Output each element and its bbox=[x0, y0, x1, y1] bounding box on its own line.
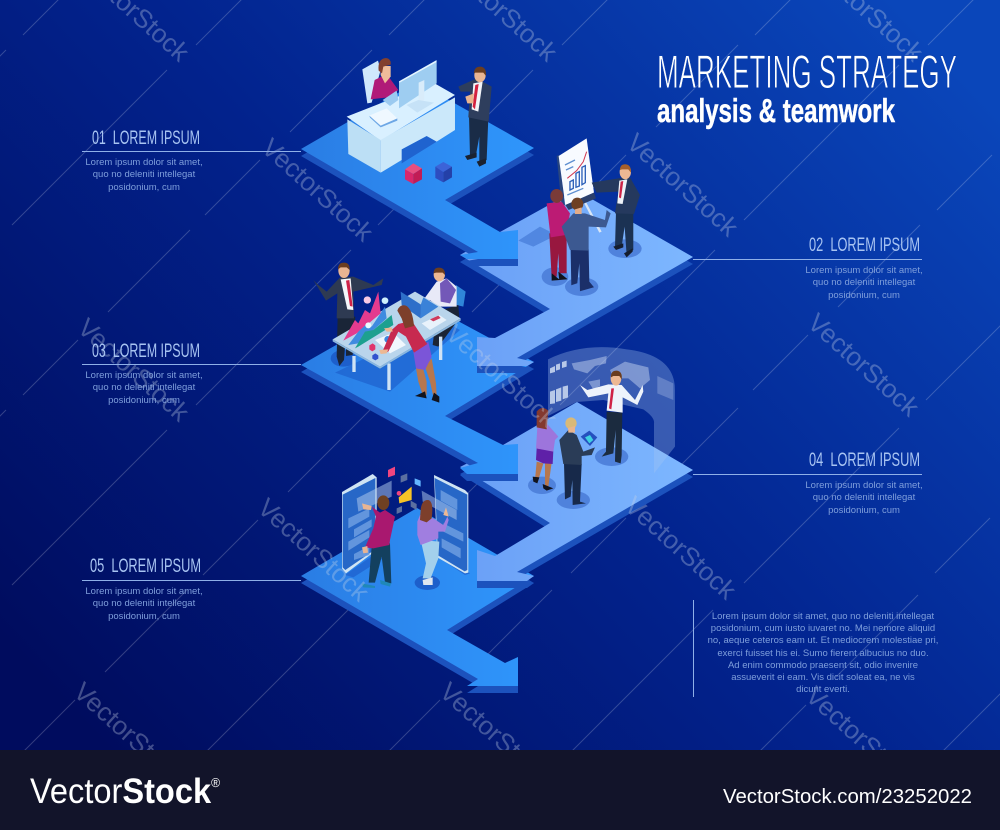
label 02: Lorem ipsum dolor sit amet, bbox=[805, 265, 923, 276]
label 04: posidonium, cum bbox=[828, 505, 900, 516]
watermark VectorStock texts: VectorStock bbox=[440, 318, 564, 434]
man middle bbox=[562, 198, 611, 296]
footer bar bbox=[0, 750, 1000, 830]
label 04: Lorem ipsum dolor sit amet, bbox=[805, 480, 923, 491]
cube pink bbox=[405, 163, 422, 184]
label 01 bbox=[82, 128, 301, 193]
paragraph block: exerci fuisset his ei. Sumo fierent albucius no duo. bbox=[717, 648, 929, 659]
scene 4: world map screen bbox=[528, 347, 675, 509]
label 04: 04 LOREM IPSUM bbox=[809, 450, 920, 471]
label 04: quo no deleniti intellegat bbox=[813, 492, 916, 503]
watermark VectorStock texts: VectorStock bbox=[256, 132, 380, 248]
label 04 bbox=[693, 450, 923, 516]
paragraph block: Lorem ipsum dolor sit amet, quo no deleniti intellegat bbox=[712, 611, 935, 622]
label 03: posidonium, cum bbox=[108, 395, 180, 406]
footer bar: VectorStock.com/23252022 bbox=[723, 786, 972, 808]
floor shadow bbox=[518, 227, 557, 247]
woman lavender bbox=[528, 408, 558, 494]
watermark VectorStock texts: VectorStock bbox=[619, 490, 743, 606]
paragraph block: Ad enim commodo praesent sit, odio invenire bbox=[728, 660, 918, 671]
woman leaning bbox=[379, 305, 439, 403]
watermark VectorStock texts: VectorStock bbox=[434, 676, 558, 792]
watermark VectorStock texts: VectorStock bbox=[802, 307, 926, 423]
label 05: Lorem ipsum dolor sit amet, bbox=[85, 586, 203, 597]
watermark VectorStock texts: VectorStock bbox=[800, 680, 924, 796]
holographic screen bbox=[548, 347, 675, 473]
desk bbox=[347, 83, 455, 173]
scene 5: smartphones bbox=[342, 467, 470, 590]
right phone bbox=[422, 475, 468, 573]
platform 1 bbox=[301, 82, 534, 266]
seated woman bbox=[371, 58, 398, 99]
cube blue bbox=[435, 162, 452, 182]
platform 3 bbox=[301, 299, 534, 481]
laptop bbox=[401, 292, 438, 318]
label 03: 03 LOREM IPSUM bbox=[92, 341, 200, 362]
label 02: 02 LOREM IPSUM bbox=[809, 235, 920, 256]
seated man bbox=[423, 268, 466, 347]
man on phone bbox=[458, 67, 492, 167]
step arrows platforms bbox=[301, 82, 693, 693]
title bbox=[657, 45, 957, 129]
paragraph block: dicunt everti. bbox=[796, 684, 850, 695]
platform 4 bbox=[460, 402, 693, 588]
label 05: quo no deleniti intellegat bbox=[93, 598, 196, 609]
paragraph block: assueverit ei eam. Vis dicit soleat ea, ne vis bbox=[731, 672, 915, 683]
platform 5 bbox=[301, 508, 534, 693]
floating icons bbox=[388, 467, 421, 514]
left phone bbox=[342, 474, 392, 573]
woman lavender sweater bbox=[415, 500, 449, 590]
footer logo: ® bbox=[211, 775, 220, 790]
label 05: 05 LOREM IPSUM bbox=[90, 556, 201, 577]
phone floor shadow bbox=[345, 555, 470, 577]
scene 3: analysis table bbox=[313, 263, 466, 403]
label 01: Lorem ipsum dolor sit amet, bbox=[85, 157, 203, 168]
label 01: 01 LOREM IPSUM bbox=[92, 128, 200, 149]
scene 1: office desk bbox=[347, 58, 492, 184]
chair bbox=[362, 61, 381, 103]
label 01: quo no deleniti intellegat bbox=[93, 169, 196, 180]
blonde man tablet bbox=[557, 417, 597, 509]
monitor bbox=[399, 60, 437, 113]
paragraph block: posidonium, cum iusto iuvaret no. Mei nemore aliquid bbox=[711, 623, 935, 634]
table bbox=[333, 292, 461, 390]
table floor shadow bbox=[335, 321, 460, 392]
watermark VectorStock texts: VectorStock bbox=[72, 312, 196, 428]
label 02 bbox=[693, 235, 923, 301]
label 02: posidonium, cum bbox=[828, 290, 900, 301]
watermark VectorStock texts: VectorStock bbox=[252, 492, 376, 608]
paragraph block bbox=[694, 600, 938, 697]
subtitle: analysis & teamwork bbox=[657, 92, 895, 129]
watermark VectorStock texts: VectorStock bbox=[621, 127, 745, 243]
label 02: quo no deleniti intellegat bbox=[813, 277, 916, 288]
flipchart bbox=[557, 138, 602, 233]
man magenta hoodie bbox=[362, 495, 395, 588]
watermark VectorStock texts: VectorStock bbox=[68, 676, 192, 792]
label 05 bbox=[82, 556, 301, 622]
woman magenta bbox=[542, 189, 570, 286]
footer logo: VectorStock bbox=[30, 772, 218, 811]
label 03: Lorem ipsum dolor sit amet, bbox=[85, 370, 203, 381]
scene 2: flipchart team bbox=[518, 138, 642, 296]
platform 2 bbox=[460, 190, 693, 373]
3d chart bbox=[343, 292, 393, 360]
presenter man bbox=[592, 164, 642, 258]
man white shirt bbox=[580, 371, 643, 466]
paragraph block: no, aeque ceteros eam ut. Et mediocrem molestiae pri, bbox=[708, 635, 938, 646]
label 01: posidonium, cum bbox=[108, 182, 180, 193]
label 03: quo no deleniti intellegat bbox=[93, 382, 196, 393]
label 05: posidonium, cum bbox=[108, 611, 180, 622]
label 03 bbox=[82, 341, 301, 406]
man standing left bbox=[313, 263, 383, 367]
